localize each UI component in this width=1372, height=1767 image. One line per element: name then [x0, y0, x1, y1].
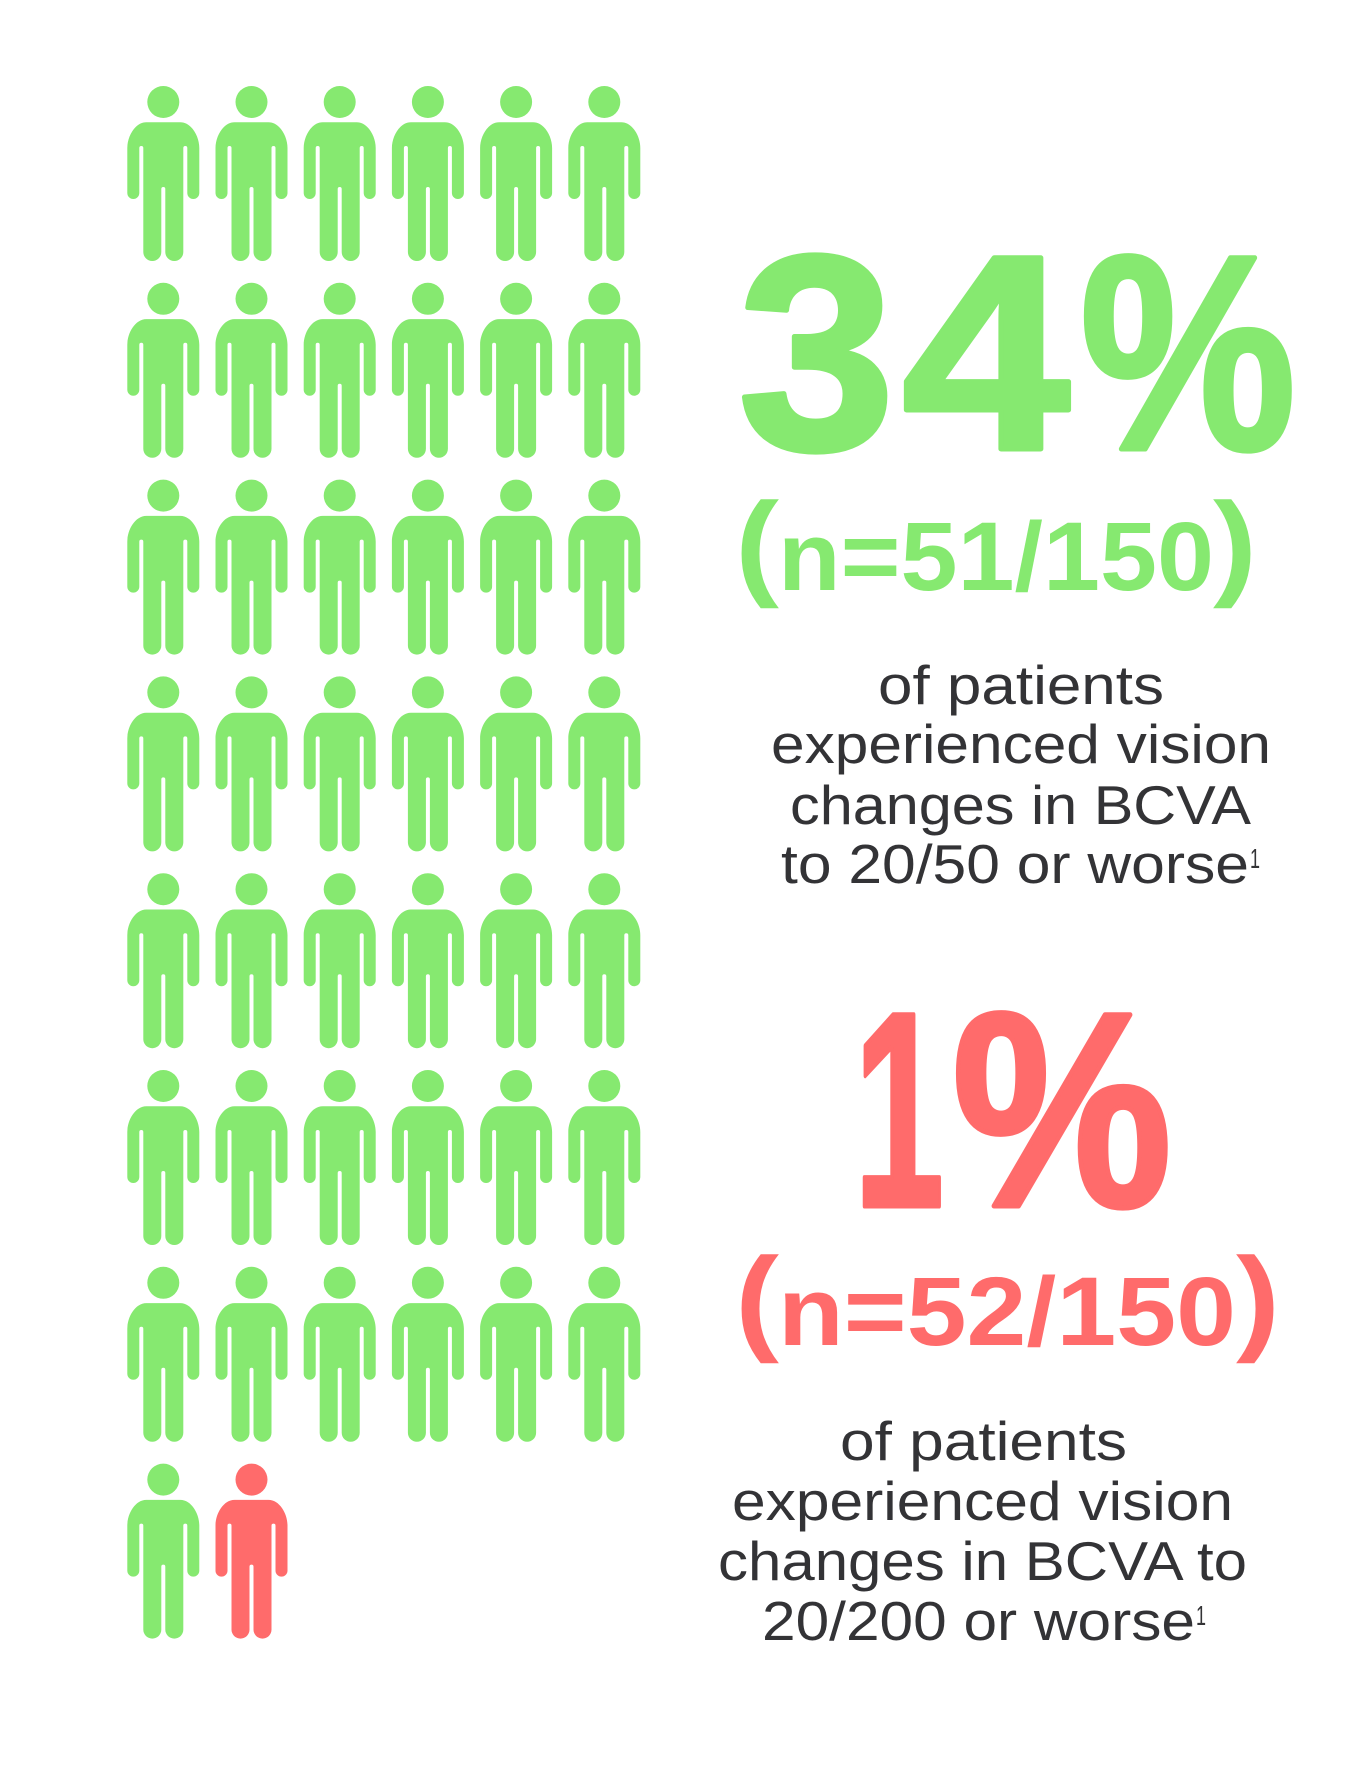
description: 20/50 or worse	[771, 654, 1271, 895]
description: 20/200 or worse: 1	[1196, 1600, 1206, 1631]
people row 7	[127, 1267, 640, 1442]
stat count: n=52/150: (	[735, 1233, 779, 1364]
description: 20/200 or worse: changes in BCVA to	[718, 1530, 1247, 1592]
description: 20/50 or worse: changes in BCVA	[790, 774, 1251, 836]
stat: 34 percent: 3	[738, 197, 895, 508]
stat count: n=51/150: n=51/150	[778, 502, 1214, 611]
stat count: n=52/150: n=52/150	[778, 1257, 1236, 1366]
people row 1	[127, 86, 640, 261]
description: 20/50 or worse: 1	[1250, 843, 1260, 874]
stat count: n=52/150	[735, 1233, 1280, 1366]
description: 20/200 or worse: of patients	[840, 1410, 1127, 1472]
stat: 1 percent: 1	[854, 954, 944, 1265]
people row 2	[127, 283, 640, 458]
people row 3	[127, 480, 640, 655]
description: 20/200 or worse: 20/200 or worse	[762, 1590, 1195, 1652]
stat count: n=52/150: )	[1236, 1233, 1280, 1364]
stat: 1 percent: %	[952, 954, 1172, 1265]
description: 20/50 or worse: experienced vision	[771, 713, 1271, 775]
stat count: n=51/150	[735, 478, 1257, 611]
description: 20/50 or worse: of patients	[878, 654, 1164, 716]
stat: 34 percent: %	[1080, 197, 1296, 508]
people row 6	[127, 1070, 640, 1245]
green person, last row	[127, 1464, 199, 1639]
people row 4	[127, 676, 640, 851]
stat: 34 percent: 4	[902, 197, 1072, 508]
red person, last row	[216, 1464, 288, 1639]
stat count: n=51/150: (	[735, 478, 779, 609]
pictogram: people grid	[127, 86, 640, 1639]
stat count: n=51/150: )	[1213, 478, 1257, 609]
description: 20/200 or worse	[718, 1410, 1247, 1652]
description: 20/50 or worse: to 20/50 or worse	[781, 833, 1249, 895]
description: 20/200 or worse: experienced vision	[732, 1470, 1233, 1532]
people row 5	[127, 873, 640, 1048]
